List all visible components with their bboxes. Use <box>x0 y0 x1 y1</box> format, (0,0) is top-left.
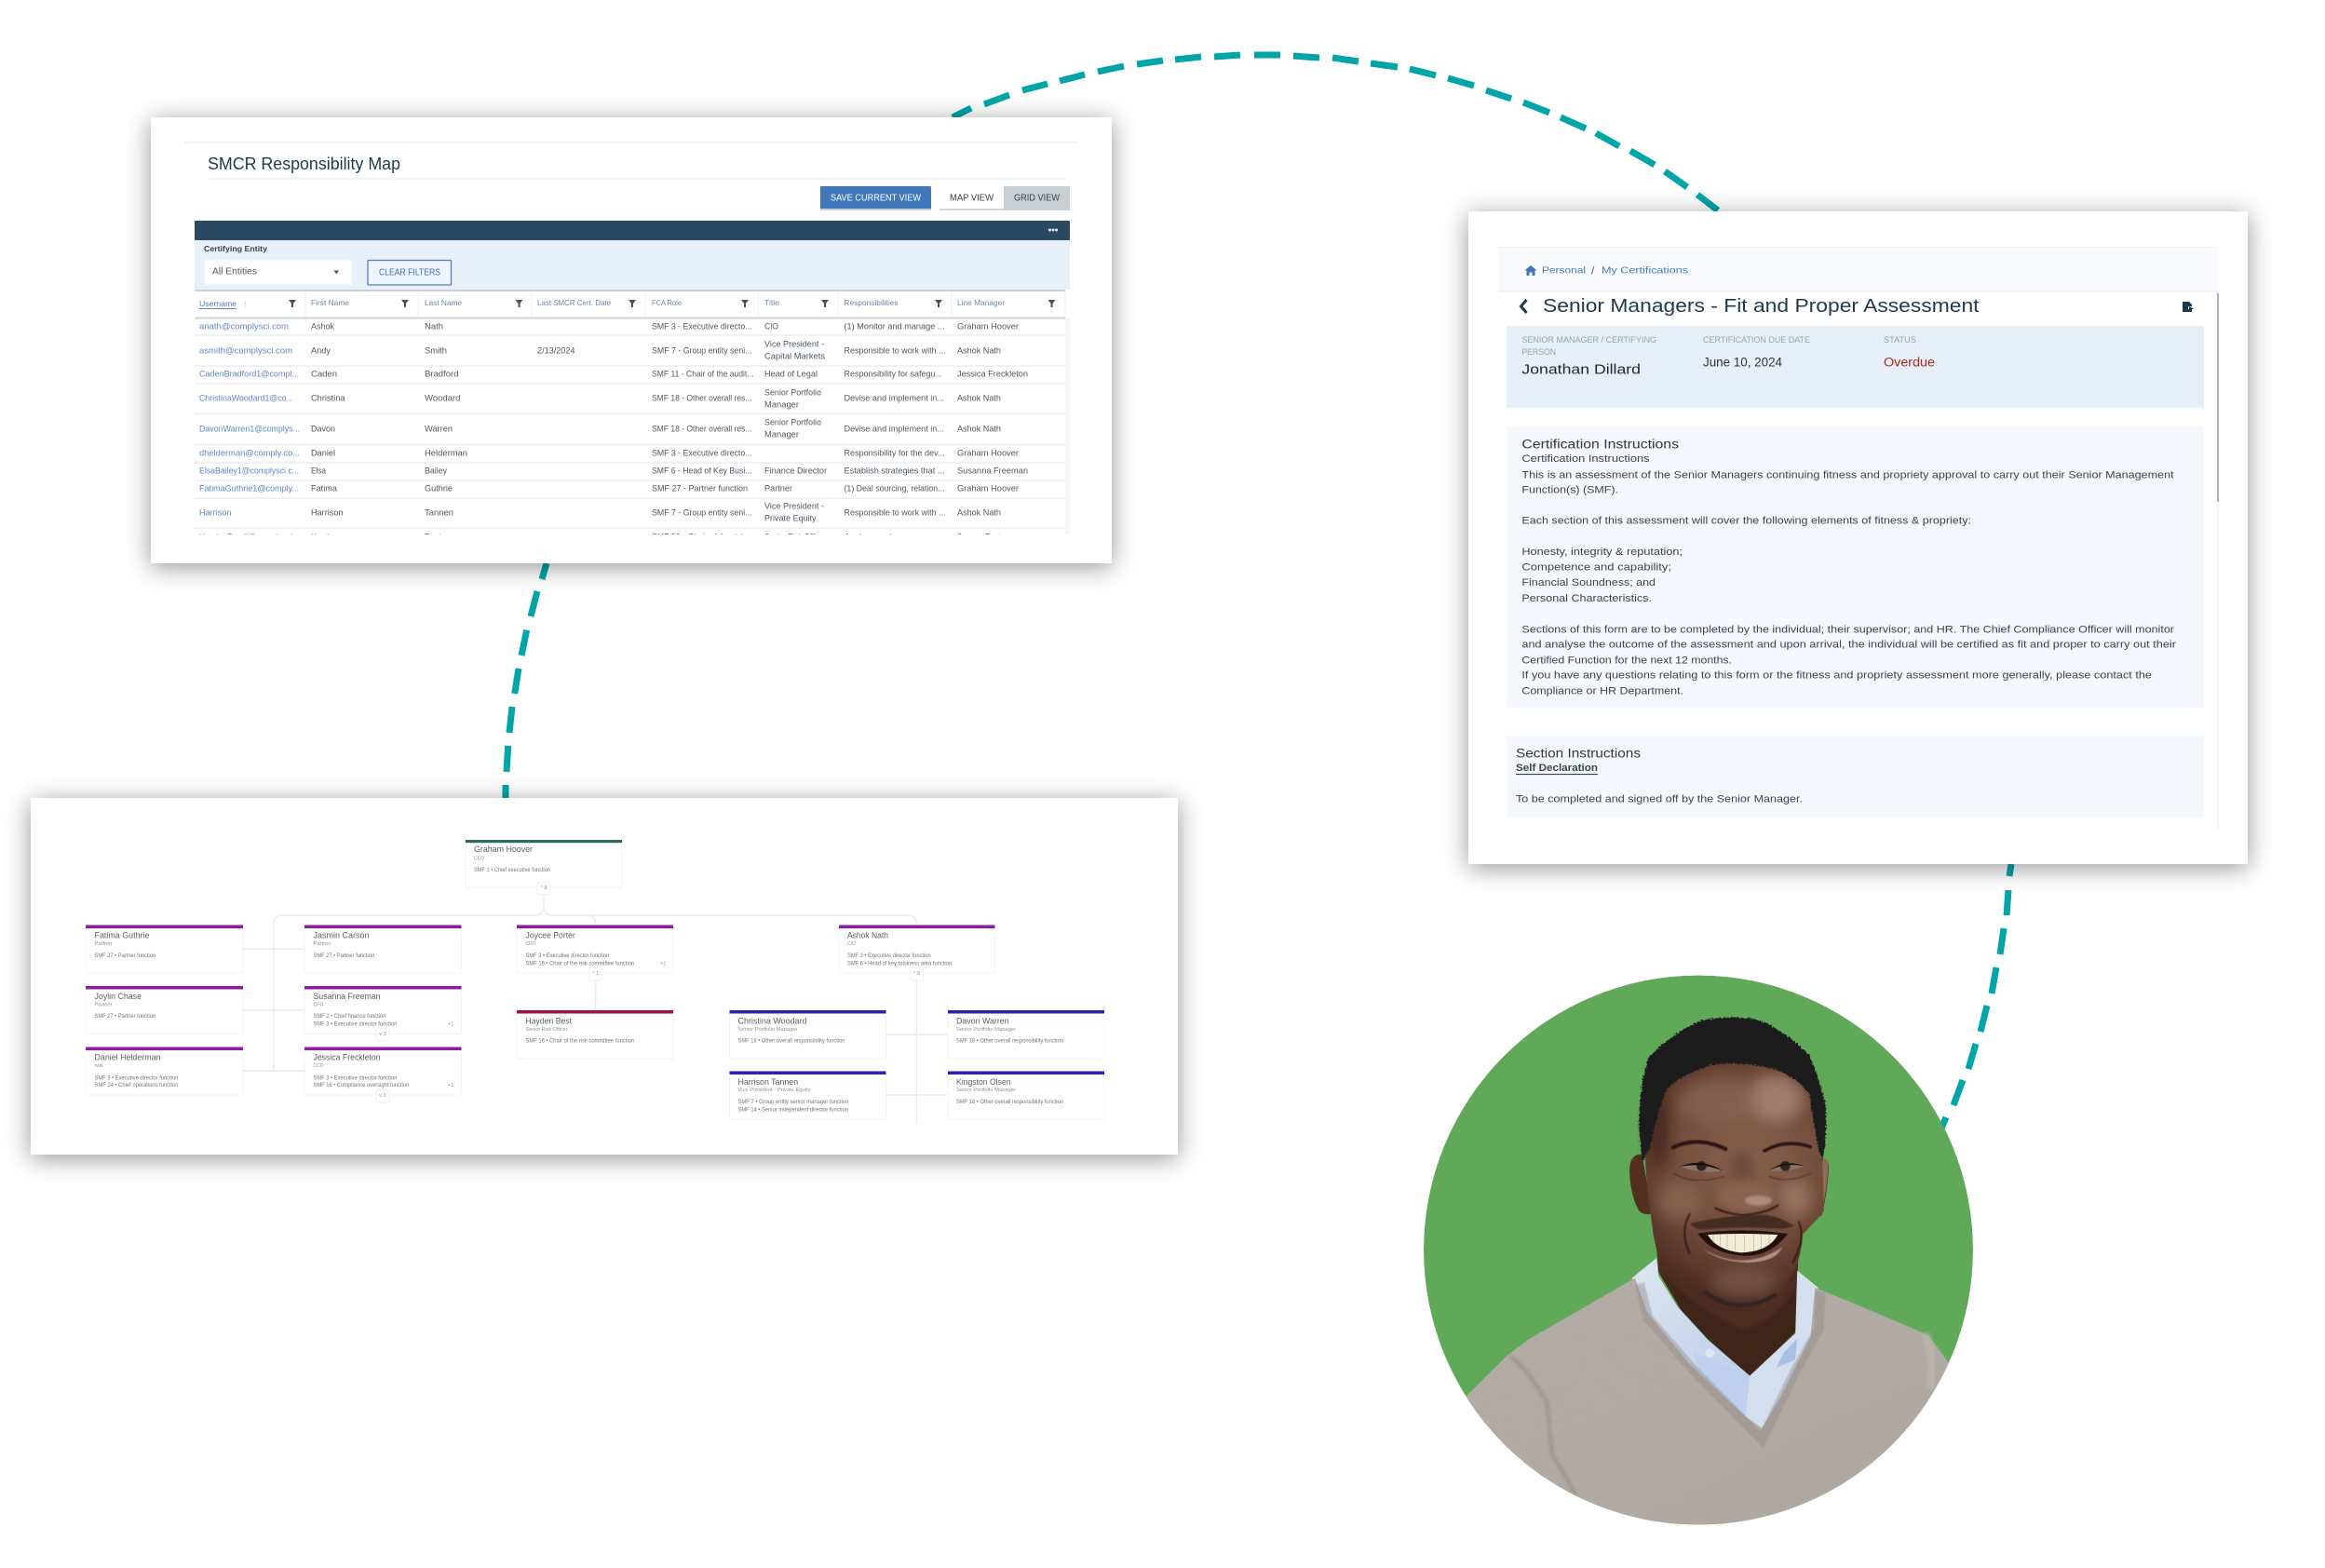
smile lines <box>1684 1213 1802 1264</box>
card: Kingston Olsen: Kingston Olsen <box>956 1077 1011 1087</box>
eyebrows <box>1673 1142 1810 1151</box>
filter strip <box>195 240 1070 291</box>
certification instructions box: Each section of this assessment will cover the following elements of fitness & propriety: <box>1521 516 1971 527</box>
certification instructions box: Financial Soundness; and <box>1521 577 1656 588</box>
section instructions box: Section Instructions <box>1516 747 1641 760</box>
table header row <box>195 291 1065 318</box>
row: Fatima Guthrie: (1) Deal sourcing, relation... <box>844 484 944 493</box>
certification instructions box: Certification Instructions <box>1521 453 1650 465</box>
summary box: June 10, 2024 <box>1703 356 1782 369</box>
table header row: ↑ <box>243 299 247 308</box>
row: Andy Smith: Ashok Nath <box>957 346 1001 356</box>
row: Elsa Bailey <box>199 467 1028 475</box>
section instructions box <box>1507 737 2204 817</box>
card: Joycee Porter: SMF 16 • Chair of the risk committee function <box>525 961 634 966</box>
row: Andy Smith <box>199 341 1000 361</box>
row: Andy Smith: SMF 7 - Group entity seni... <box>652 346 752 356</box>
face highlights and shadows <box>1649 1075 1811 1297</box>
summary box: Overdue <box>1884 356 1935 369</box>
row: Davon Warren: Manager <box>764 430 799 439</box>
row: Christina Woodard: SMF 18 - Other overall res... <box>652 393 752 404</box>
table header row: Responsibilities <box>844 298 898 307</box>
row: Fatima Guthrie: Graham Hoover <box>957 484 1019 493</box>
row: Andy Smith: Responsible to work with ... <box>844 346 946 356</box>
row: Caden Bradford: Responsibility for safegu... <box>844 369 942 380</box>
card: Fatima Guthrie <box>86 926 243 973</box>
row: Ashok Nath: anath@complysci.com <box>199 322 289 331</box>
green circle <box>1424 976 1973 1525</box>
card: Susanna Freeman: SMF 2 • Chief finance function <box>313 1014 385 1020</box>
icon: home <box>1525 265 1536 276</box>
certification instructions box: Certified Function for the next 12 months. <box>1521 656 1732 667</box>
row: Harrison Tannen: Responsible to work with ... <box>844 508 946 518</box>
row: Hayden Best (clipped): Hayden <box>311 533 337 542</box>
heading: Senior Managers - Fit and Proper Assessment: Senior Managers - Fit and Proper Assessment <box>1543 296 1980 317</box>
card: Christina Woodard: Christina Woodard <box>737 1017 806 1026</box>
card: Joycee Porter: ^ 1 <box>592 971 599 977</box>
row: Davon Warren: Warren <box>425 425 453 434</box>
row: Hayden Best (clipped): Analyze and assess... <box>844 533 927 542</box>
filter strip: All Entities <box>212 266 257 277</box>
card: Susanna Freeman: Susanna Freeman <box>313 992 380 1001</box>
table header row: First Name <box>311 298 349 307</box>
body <box>1466 1250 1949 1525</box>
row: Andy Smith: Capital Markets <box>764 352 825 361</box>
card: Ashok Nath <box>839 926 994 980</box>
row: Christina Woodard: Senior Portfolio <box>764 387 821 399</box>
certification instructions box: and analyse the outcome of the assessment and upon arrival, the individual will be certified as fit and proper to carry out their <box>1521 639 2176 650</box>
row: Elsa Bailey: Establish strategies that ... <box>844 466 944 477</box>
heading: SMCR Responsibility Map: SMCR Responsibility Map <box>208 155 400 173</box>
summary box: Jonathan Dillard <box>1521 363 1641 378</box>
row: Christina Woodard: Ashok Nath <box>957 393 1001 404</box>
sweater <box>1466 1277 1949 1525</box>
table header row: Last SMCR Cert. Date <box>537 298 611 307</box>
table header row: Last Name <box>425 298 462 307</box>
row: Harrison Tannen: Tannen <box>425 508 453 518</box>
card: Christina Woodard: SMF 18 • Other overall responsibility function <box>737 1039 845 1045</box>
face <box>1644 1062 1824 1279</box>
card: Jasmin Carson <box>304 926 462 973</box>
card: Hayden Best: Senior Risk Officer <box>525 1027 568 1033</box>
card: Daniel Helderman <box>86 1047 243 1095</box>
card: Harrison Tannen: Harrison Tannen <box>737 1077 798 1087</box>
row: Caden Bradford: SMF 11 - Chair of the audit... <box>652 369 754 380</box>
row: Daniel Helderman <box>199 450 1019 458</box>
card: Ashok Nath: SMF 6 • Head of key business area function <box>847 961 952 966</box>
card: Christina Woodard: Senior Portfolio Manager <box>737 1027 798 1033</box>
certification instructions box: This is an assessment of the Senior Managers continuing fitness and propriety approval to carry out their Senior Management <box>1521 469 2174 480</box>
icon: back chevron <box>1521 300 1527 313</box>
summary box: SENIOR MANAGER / CERTIFYING <box>1521 335 1656 345</box>
row: Harrison Tannen <box>199 503 1000 523</box>
row: Daniel Helderman: Graham Hoover <box>957 449 1019 458</box>
nose <box>1715 1182 1778 1215</box>
row: Harrison Tannen: Vice President - <box>764 501 824 512</box>
table header row: Username <box>199 299 237 308</box>
row: Harrison Tannen: Harrison <box>199 508 231 518</box>
card: Fatima Guthrie: SMF 27 • Partner function <box>95 953 155 959</box>
button: save current view <box>820 186 931 210</box>
row: Harrison Tannen: Harrison <box>311 508 343 518</box>
certification instructions box: Competence and capability; <box>1521 562 1671 574</box>
mouth <box>1697 1230 1788 1263</box>
breadcrumb bar: Personal <box>1542 264 1586 276</box>
row: Caden Bradford: Jessica Freckleton <box>957 369 1028 380</box>
row: Davon Warren: Ashok Nath <box>957 425 1001 434</box>
row: Harrison Tannen: SMF 7 - Group entity seni... <box>652 508 752 518</box>
card: Daniel Helderman: null <box>95 1063 102 1069</box>
row: Davon Warren: Davon <box>311 425 335 434</box>
card: Jessica Freckleton: +1 <box>448 1083 453 1088</box>
row: Daniel Helderman: dhelderman@comply.co... <box>199 449 300 458</box>
row: Fatima Guthrie: Fatima <box>311 484 338 493</box>
card: Joycee Porter: CRO <box>525 941 536 947</box>
card: Joylin Chase: SMF 27 • Partner function <box>95 1014 155 1020</box>
row: Harrison Tannen: Ashok Nath <box>957 508 1001 518</box>
summary box <box>1507 326 2204 408</box>
card: Kingston Olsen: SMF 18 • Other overall responsibility function <box>956 1100 1063 1105</box>
button: grid view <box>1004 186 1070 210</box>
card: Daniel Helderman: SMF 3 • Executive director function <box>95 1076 179 1082</box>
card: Jessica Freckleton: CCO <box>313 1063 324 1069</box>
row: Caden Bradford: Caden <box>311 369 337 380</box>
breadcrumb bar: / <box>1591 264 1595 277</box>
row: Andy Smith: Smith <box>425 346 447 356</box>
row: Fatima Guthrie <box>199 485 1019 493</box>
row: Christina Woodard: Woodard <box>425 393 460 404</box>
card: Joylin Chase: Partner <box>95 1002 113 1007</box>
row: Daniel Helderman: SMF 3 - Executive directo... <box>652 449 752 458</box>
row: Elsa Bailey: Bailey <box>425 466 447 477</box>
dashed connector: map to org chart <box>506 563 547 798</box>
button: save current view: SAVE CURRENT VIEW <box>831 194 922 203</box>
row: Christina Woodard: Christina <box>311 393 345 404</box>
card: Jessica Freckleton: SMF 16 • Compliance oversight function <box>313 1083 409 1088</box>
row: Hayden Best (clipped): Senior Risk Officer <box>764 533 826 542</box>
card: Graham Hoover <box>466 840 622 895</box>
row: Elsa Bailey: ElsaBailey1@complysci.c... <box>199 466 299 477</box>
card: Joycee Porter <box>517 926 673 980</box>
card: Daniel Helderman: Daniel Helderman <box>95 1052 160 1061</box>
panel: org chart <box>31 798 1178 1155</box>
neck <box>1656 1250 1799 1376</box>
card: Graham Hoover: Graham Hoover <box>474 845 533 854</box>
breadcrumb bar: My Certifications <box>1602 264 1688 276</box>
row: Hayden Best (clipped): HaydenBest1@complysci... <box>199 533 299 542</box>
card: Jessica Freckleton <box>304 1047 462 1102</box>
icon: export <box>2183 302 2194 312</box>
eyes <box>1673 1161 1811 1181</box>
row: Ashok Nath: (1) Monitor and manage ... <box>844 322 944 331</box>
card: Hayden Best: SMF 16 • Chair of the risk committee function <box>525 1039 634 1045</box>
filter strip: CLEAR FILTERS <box>379 268 440 277</box>
upper lip and moustache <box>1690 1215 1794 1230</box>
card: Jessica Freckleton: Jessica Freckleton <box>313 1052 380 1061</box>
icons: column filters <box>289 300 1056 307</box>
summary box: STATUS <box>1884 335 1916 345</box>
card: Graham Hoover: CEO <box>474 857 485 862</box>
card: Harrison Tannen: SMF 7 • Group entity senior manager function <box>737 1100 849 1105</box>
breadcrumb bar <box>1498 247 2218 292</box>
row: Daniel Helderman: Daniel <box>311 449 335 458</box>
certification instructions box: Function(s) (SMF). <box>1521 484 1618 495</box>
row: Elsa Bailey: Elsa <box>311 466 327 477</box>
panel: fit and proper assessment <box>1468 211 2248 864</box>
summary box: CERTIFICATION DUE DATE <box>1703 335 1810 345</box>
row: Christina Woodard: ChristinaWoodard1@co... <box>199 393 293 404</box>
card: Joycee Porter: Joycee Porter <box>525 931 575 940</box>
certification instructions box: Certification Instructions <box>1521 438 1679 451</box>
card: Susanna Freeman <box>304 986 462 1041</box>
table title bar <box>195 221 1070 240</box>
row: Ashok Nath: SMF 3 - Executive directo... <box>652 322 752 331</box>
card: Ashok Nath: CIO <box>847 941 857 947</box>
card: Joycee Porter: SMF 3 • Executive director function <box>525 953 609 959</box>
card: Jasmin Carson: Partner <box>313 941 331 947</box>
row: Andy Smith: asmith@complysci.com <box>199 346 292 356</box>
card: Jessica Freckleton: v 2 <box>379 1093 386 1099</box>
org chart connectors <box>243 895 948 1124</box>
card: Fatima Guthrie: Partner <box>95 941 113 947</box>
card: Graham Hoover: SMF 1 • Chief executive function <box>474 868 550 873</box>
card: Susanna Freeman: CFO <box>313 1002 324 1007</box>
button: grid view: GRID VIEW <box>1014 194 1061 203</box>
row: Hayden Best (clipped): SMF 16 - Chair of the risk... <box>652 533 752 542</box>
card: Davon Warren: SMF 18 • Other overall responsibility function <box>956 1039 1063 1045</box>
card: Davon Warren <box>948 1010 1104 1059</box>
card: Kingston Olsen: Senior Portfolio Manager <box>956 1088 1016 1093</box>
row: Davon Warren: Devise and implement in... <box>844 425 944 434</box>
row: Fatima Guthrie: FatimaGuthrie1@comply... <box>199 484 299 493</box>
row: Fatima Guthrie: Guthrie <box>425 484 453 493</box>
card: Christina Woodard <box>730 1010 886 1059</box>
card: Ashok Nath: SMF 3 • Executive director function <box>847 953 931 959</box>
card: Jasmin Carson: SMF 27 • Partner function <box>313 953 374 959</box>
certification instructions box: Compliance or HR Department. <box>1521 685 1683 696</box>
section instructions box: Self Declaration <box>1516 763 1598 774</box>
row: Elsa Bailey: Finance Director <box>764 466 827 477</box>
row: Ashok Nath: Ashok <box>311 322 334 331</box>
card: Daniel Helderman: SMF 24 • Chief operations function <box>95 1083 179 1088</box>
row: Caden Bradford: Bradford <box>425 369 458 380</box>
ears <box>1629 1155 1829 1216</box>
head <box>1629 1018 1829 1312</box>
row: Caden Bradford: Head of Legal <box>764 369 818 380</box>
button: map view <box>939 186 1004 210</box>
row: Daniel Helderman: Helderman <box>425 449 467 458</box>
dashed connector: top arc <box>953 55 1718 210</box>
card: Susanna Freeman: v 3 <box>379 1032 386 1037</box>
panel: SMCR responsibility map <box>151 117 1112 563</box>
row: Ashok Nath: Graham Hoover <box>957 322 1019 331</box>
row: Daniel Helderman: Responsibility for the dev... <box>844 449 944 458</box>
row: Ashok Nath: CIO <box>764 322 778 331</box>
row: Christina Woodard: Devise and implement in... <box>844 393 944 404</box>
button: map view: MAP VIEW <box>950 194 994 203</box>
goatee stubble <box>1704 1291 1777 1305</box>
summary box: PERSON <box>1521 347 1556 358</box>
row: Fatima Guthrie: Partner <box>764 484 792 493</box>
card: Susanna Freeman: SMF 3 • Executive director function <box>313 1022 397 1028</box>
row: Ashok Nath: Nath <box>425 322 443 331</box>
sweater shading <box>1510 1333 1932 1498</box>
sweater neckline trim <box>1640 1284 1820 1440</box>
card: Joycee Porter: +1 <box>660 961 666 966</box>
row: Davon Warren: Senior Portfolio <box>764 417 821 428</box>
hair <box>1639 1018 1826 1161</box>
row: Davon Warren: SMF 18 - Other overall res... <box>652 425 752 434</box>
filter strip: Certifying Entity <box>204 244 267 253</box>
portrait: smiling man in grey sweater on green circle <box>1424 976 1985 1538</box>
card: Ashok Nath: ^ 5 <box>913 971 920 977</box>
data table rows <box>195 322 1065 542</box>
card: Susanna Freeman: +1 <box>448 1022 453 1028</box>
row: Andy Smith: Andy <box>311 346 331 356</box>
row: Caden Bradford <box>199 371 1028 378</box>
row: Fatima Guthrie: SMF 27 - Partner function <box>652 484 748 493</box>
row: Hayden Best (clipped): Joycee Porter <box>957 533 1007 542</box>
certification instructions box: Honesty, integrity & reputation; <box>1521 547 1683 558</box>
card: Davon Warren: Senior Portfolio Manager <box>956 1027 1016 1033</box>
row: Christina Woodard <box>199 389 1000 410</box>
section instructions box: To be completed and signed off by the Senior Manager. <box>1516 793 1803 804</box>
card: Harrison Tannen <box>730 1071 886 1119</box>
certification instructions box <box>1507 427 2204 708</box>
card: Jasmin Carson: Jasmin Carson <box>313 931 369 940</box>
table header row: FCA Role <box>652 298 682 307</box>
card: Kingston Olsen <box>948 1071 1104 1119</box>
shirt collar <box>1632 1258 1818 1434</box>
row: Elsa Bailey: SMF 6 - Head of Key Busi... <box>652 466 752 477</box>
row: Harrison Tannen: Private Equity <box>764 514 817 523</box>
card: Harrison Tannen: SMF 14 • Senior independent director function <box>737 1108 848 1114</box>
card: Fatima Guthrie: Fatima Guthrie <box>95 931 149 940</box>
card: Joylin Chase: Joylin Chase <box>95 992 142 1001</box>
table header row: Line Manager <box>957 298 1005 307</box>
card: Ashok Nath: Ashok Nath <box>847 931 888 940</box>
row: Ashok Nath <box>199 323 1019 331</box>
row: Caden Bradford: CadenBradford1@compl... <box>199 369 299 380</box>
certification instructions box: If you have any questions relating to this form or the fitness and propriety assessment more generally, please contact the <box>1521 670 2152 682</box>
card: Harrison Tannen: Vice President - Private Equity <box>737 1088 811 1093</box>
card: Joylin Chase <box>86 986 243 1034</box>
row: Hayden Best (clipped): Best <box>425 533 441 542</box>
card: Jessica Freckleton: SMF 3 • Executive director function <box>313 1076 397 1082</box>
card: Graham Hoover: ^ 8 <box>540 885 547 891</box>
row: Elsa Bailey: Susanna Freeman <box>957 466 1028 477</box>
row: Christina Woodard: Manager <box>764 400 799 410</box>
card: Hayden Best <box>517 1010 673 1059</box>
dashed connector: certification to person <box>1940 864 2011 1130</box>
scrollbar <box>2217 292 2219 829</box>
row: Andy Smith: Vice President - <box>764 339 824 350</box>
row: Davon Warren <box>199 419 1000 439</box>
card: Davon Warren: Davon Warren <box>956 1017 1009 1026</box>
certification instructions box: Personal Characteristics. <box>1521 593 1652 604</box>
row: Andy Smith: 2/13/2024 <box>537 346 575 356</box>
table header row: Title <box>764 298 779 307</box>
card: Hayden Best: Hayden Best <box>525 1017 572 1026</box>
row: Davon Warren: DavonWarren1@complys... <box>199 425 300 434</box>
certification instructions box: Sections of this form are to be completed by the individual; their supervisor; and HR. The Chief Compliance Officer will monitor <box>1521 624 2174 635</box>
